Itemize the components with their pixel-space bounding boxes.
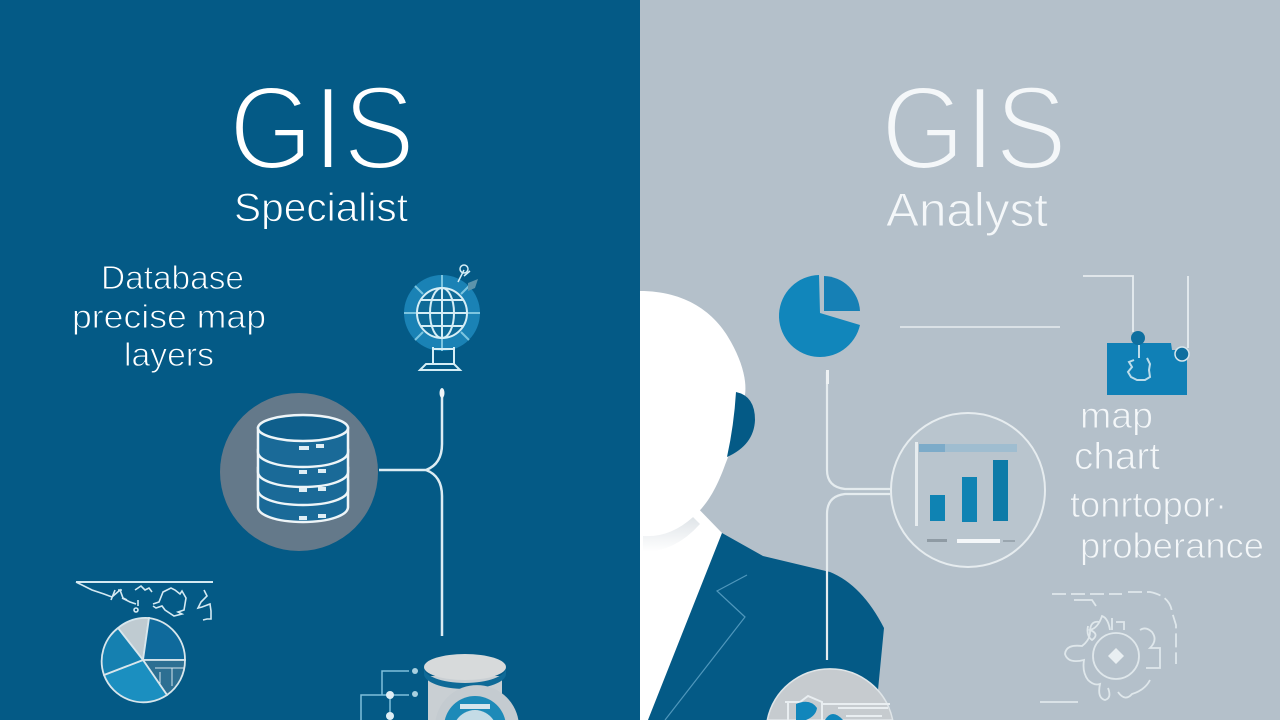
title: GIS Analyst: Analyst — [886, 183, 1048, 236]
icon: gear with dashed arc — [1040, 592, 1176, 702]
text block: specialist skills — [72, 260, 266, 374]
ear — [727, 392, 755, 457]
title: GIS Specialist: GIS — [229, 62, 415, 195]
icon: database in grey circle — [220, 393, 378, 551]
icon: map tile with nodes — [1083, 276, 1189, 395]
text block: specialist skills: layers — [124, 337, 214, 374]
icon: bar chart in circle — [891, 413, 1045, 567]
icon: map outline — [76, 582, 213, 620]
connector: analyst tree — [826, 370, 890, 660]
text block: analyst skills: map — [1080, 395, 1153, 436]
panel: GIS Specialist — [0, 0, 640, 720]
text block: analyst skills: chart — [1074, 436, 1160, 478]
icon: globe — [404, 265, 480, 370]
icon: lower database with node tree — [361, 654, 518, 720]
jacket lapel — [665, 575, 747, 720]
pie chart: specialist — [102, 618, 185, 702]
connector: pie to line — [900, 326, 1060, 328]
figure: silhouette of analyst — [640, 291, 884, 720]
text block: analyst skills: proberance — [1080, 525, 1264, 566]
connector: specialist tree — [379, 388, 444, 636]
suit jacket — [648, 533, 884, 720]
text block: specialist skills: Database — [101, 260, 244, 297]
title: GIS Specialist: Specialist — [234, 186, 408, 230]
shirt and neck — [640, 500, 722, 720]
panel: GIS Analyst — [640, 0, 1280, 720]
pie chart: analyst — [779, 275, 860, 357]
collar shadow — [643, 517, 700, 552]
text block: specialist skills: precise map — [72, 299, 266, 336]
title: GIS Analyst: GIS — [881, 62, 1067, 195]
icon: circle with document and pie — [767, 669, 893, 720]
head — [640, 291, 745, 536]
text block: analyst skills — [1070, 395, 1264, 566]
text block: analyst skills: tonrtopor· — [1070, 484, 1227, 525]
